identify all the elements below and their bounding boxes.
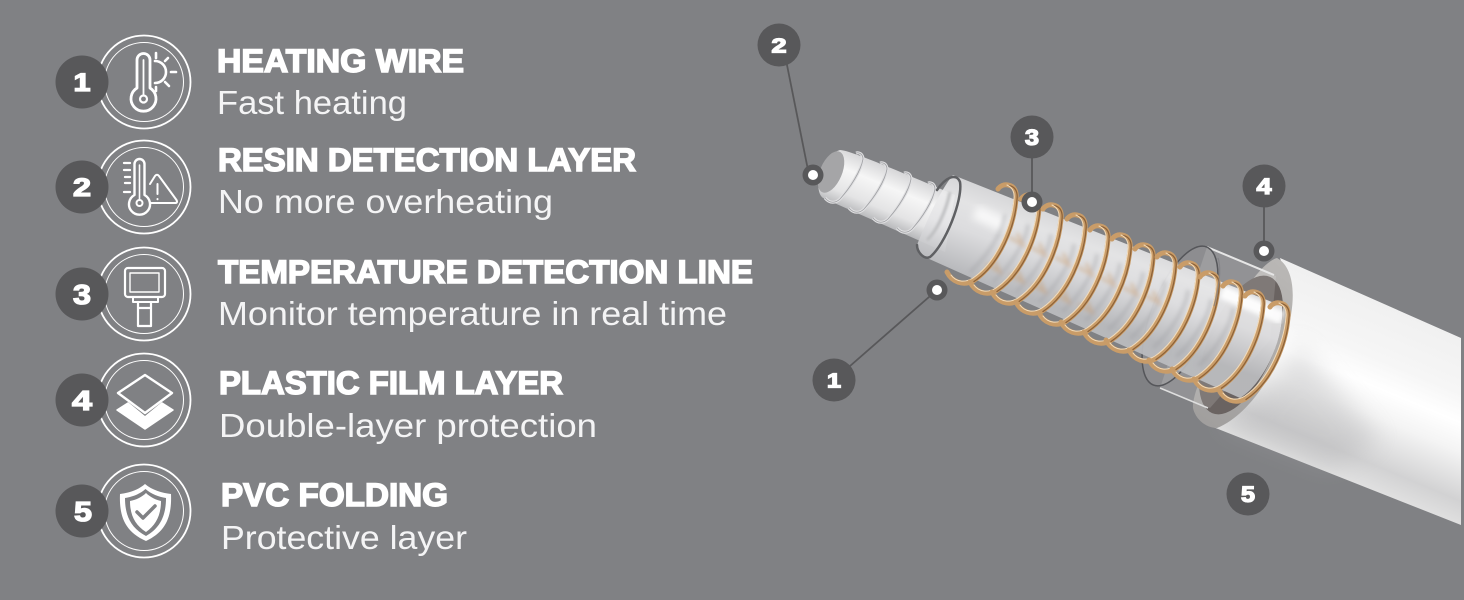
badge 5 xyxy=(56,484,108,538)
callouts xyxy=(758,24,1286,516)
callout 2: 2 xyxy=(772,36,786,58)
icon: thermometer and sun xyxy=(98,36,190,128)
core mini coils xyxy=(825,153,935,232)
callout 3: 3 xyxy=(1025,125,1039,150)
badge 1: 1 xyxy=(74,69,91,97)
heading: resin detection layer: RESIN DETECTION LAYER xyxy=(218,142,636,178)
pvc rim and cavity xyxy=(1182,258,1300,428)
callout 5 xyxy=(1226,472,1270,516)
callout 1: 1 xyxy=(827,370,841,392)
feature 1: heating wire xyxy=(56,36,464,128)
callout 1 xyxy=(812,280,948,402)
badge 2 xyxy=(56,160,108,214)
resin layer tube xyxy=(917,175,1282,398)
feature 3: temperature detection line xyxy=(56,248,753,340)
callout 4 xyxy=(1242,164,1286,262)
cable illustration xyxy=(812,147,1461,525)
pvc outer sheath xyxy=(1213,258,1461,525)
heading: plastic film layer: PLASTIC FILM LAYER xyxy=(219,365,563,401)
icon: thermometer and warning xyxy=(98,140,190,234)
badge 5: 5 xyxy=(74,496,92,527)
callout 5: 5 xyxy=(1241,482,1255,507)
text: no more overheating: No more overheating xyxy=(218,183,553,220)
feature 5: pvc folding xyxy=(56,464,467,558)
inner core xyxy=(812,147,955,252)
icon: layers xyxy=(98,354,190,446)
text: double-layer protection: Double-layer protection xyxy=(219,407,597,444)
film sleeve end ring xyxy=(1126,237,1234,395)
film ring front arc xyxy=(1214,258,1220,306)
plastic film sleeve xyxy=(1126,237,1276,408)
heading: pvc folding: PVC FOLDING xyxy=(221,477,448,513)
text: protective layer: Protective layer xyxy=(221,519,467,556)
panel: feature list xyxy=(56,36,753,558)
icon: shield with check xyxy=(98,464,190,558)
heading: temperature detection line: TEMPERATURE DETECTION LINE xyxy=(218,254,753,290)
badge 3: 3 xyxy=(73,279,91,310)
feature 4: plastic film layer xyxy=(56,354,597,446)
inner soft coil shadows xyxy=(970,214,1233,366)
callout 2 xyxy=(758,24,824,186)
badge 1 xyxy=(56,56,108,108)
tube end ring xyxy=(917,177,960,258)
badge 4 xyxy=(56,374,108,426)
copper heating coil xyxy=(947,185,1289,401)
badge 2: 2 xyxy=(73,174,91,202)
callout 4: 4 xyxy=(1256,174,1272,199)
text: monitor temperature in real time: Monitor temperature in real time xyxy=(218,295,727,332)
badge 3 xyxy=(56,268,108,320)
badge 4: 4 xyxy=(72,385,93,416)
callout 3 xyxy=(1010,116,1054,212)
heading: heating wire: HEATING WIRE xyxy=(217,43,464,79)
feature 2: resin detection layer xyxy=(56,140,636,234)
icon: temperature probe xyxy=(98,248,190,340)
text: fast heating: Fast heating xyxy=(217,84,407,121)
